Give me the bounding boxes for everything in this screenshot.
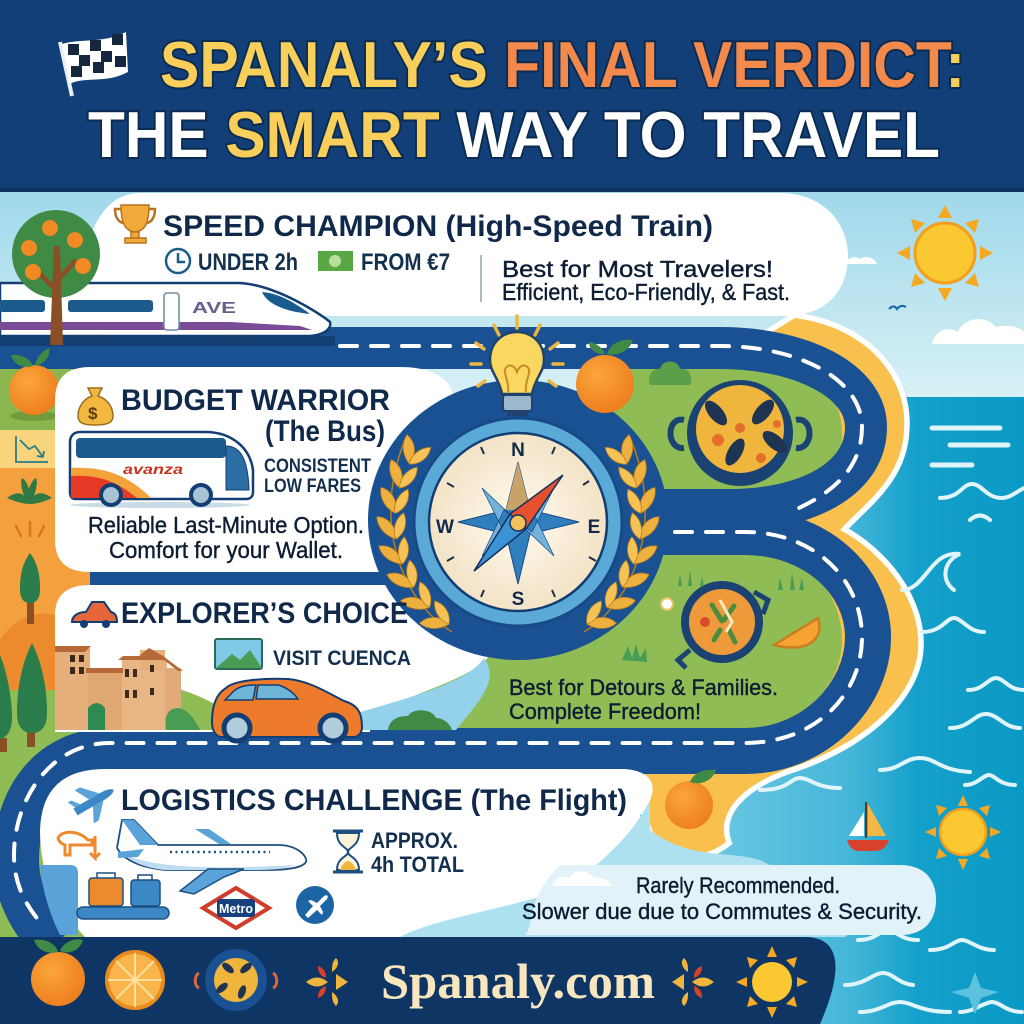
- title line 1: SPANALY’S FINAL VERDICT:: [160, 28, 965, 101]
- icon: money bag: $: [88, 404, 98, 423]
- budget description: Reliable Last-Minute Option.: [88, 512, 364, 538]
- icon: baggage conveyor: [40, 832, 169, 935]
- icon: hourglass: [333, 831, 363, 872]
- compass needle: [474, 475, 563, 571]
- icon: trophy: [115, 205, 155, 243]
- hill: [120, 680, 250, 730]
- price label: FROM €7: [361, 249, 450, 276]
- budget description: Comfort for your Wallet.: [109, 537, 343, 563]
- icon: checkered flag: [60, 32, 128, 96]
- icon: footer sun: [736, 946, 808, 1018]
- icon: paella pan large: [670, 380, 810, 486]
- roads: [0, 336, 868, 945]
- compass body: [414, 418, 622, 626]
- train: [0, 283, 330, 342]
- header band: [0, 0, 1024, 192]
- site name: Spanaly.com: [381, 953, 655, 1009]
- icon: laurel wreath: [377, 435, 659, 637]
- icon: tree small: [20, 553, 40, 624]
- icon: left orange: [9, 348, 59, 421]
- panel: budget warrior card: [55, 367, 453, 572]
- icon: money bag: [78, 388, 113, 425]
- panel: logistics challenge card: [40, 769, 653, 937]
- icon: flourish left: [306, 958, 348, 1006]
- time label: UNDER 2h: [198, 249, 298, 276]
- icon: light bulb: [471, 316, 563, 416]
- panel: compass: [368, 380, 668, 660]
- recommendation text: Slower due due to Commutes & Security.: [522, 899, 922, 924]
- icon: flourish right: [672, 958, 714, 1006]
- icon: plant: [7, 478, 52, 504]
- bush: [388, 710, 452, 730]
- compass letters: E: [588, 517, 600, 538]
- icon: cypress left: [0, 655, 12, 752]
- panel: explorer's choice card: [55, 585, 490, 732]
- compass letters: S: [512, 589, 524, 610]
- icon: grass tufts: [622, 570, 804, 662]
- detours text: Best for Detours & Families.: [509, 675, 778, 700]
- left land strip: [0, 365, 100, 940]
- icon: falling chart: [16, 436, 48, 462]
- panel: rarely recommended note: [522, 865, 936, 935]
- train logo: AVE: [192, 300, 236, 317]
- lower lagoon water: [400, 800, 850, 937]
- icon: orange slice round: [107, 952, 163, 1008]
- best for text: Efficient, Eco-Friendly, & Fast.: [502, 279, 790, 305]
- icon: banknote: [318, 251, 353, 271]
- best for text: Best for Most Travelers!: [502, 256, 773, 282]
- recommendation text: Rarely Recommended.: [636, 873, 840, 898]
- river: [360, 658, 490, 730]
- compass rose: [458, 462, 579, 584]
- icon: bush: [649, 362, 691, 385]
- cloud: lagoon: [552, 871, 612, 886]
- icon: footer orange: [31, 939, 85, 1006]
- icon: sailboat: [847, 802, 889, 851]
- icon: picture: [215, 639, 262, 669]
- compass letters: N: [511, 440, 525, 461]
- car: [212, 679, 362, 741]
- compass ticks: [447, 447, 596, 597]
- icon: metro sign: [203, 888, 269, 928]
- icon: plane small: [64, 773, 123, 829]
- icon: paella pan small: [678, 581, 768, 668]
- approx label: APPROX.: [371, 828, 458, 853]
- cloud: right: [932, 319, 1024, 344]
- compass face: [429, 433, 607, 611]
- icon: orange: [576, 340, 634, 413]
- green patch upper: [600, 360, 842, 512]
- icon: sprout rays: [16, 522, 44, 536]
- compass letters: W: [436, 517, 454, 538]
- icon: sun lower right: [925, 795, 1001, 870]
- icon: flower: [661, 598, 673, 610]
- heading: logistics challenge: LOGISTICS CHALLENGE (The Flight): [121, 784, 627, 817]
- sea background: [640, 397, 1024, 1024]
- sea waves: [760, 428, 1024, 1014]
- bird: [889, 306, 906, 309]
- bus logo: avanza: [123, 461, 183, 477]
- icon: airport circle: [296, 886, 334, 924]
- icon: orange tree: [12, 210, 100, 345]
- icon: airplane: [117, 820, 306, 894]
- heading: explorer's choice: EXPLORER’S CHOICE: [121, 597, 408, 630]
- cloud: small: [845, 257, 877, 264]
- subheading: the bus: (The Bus): [265, 415, 385, 448]
- town illustration: [55, 646, 200, 730]
- footer band: [0, 937, 835, 1024]
- detours text: Complete Freedom!: [509, 699, 701, 724]
- icon: sun top right: [897, 205, 993, 301]
- low fares label: CONSISTENT: [264, 456, 371, 477]
- icon: bus: [70, 432, 253, 508]
- approx label: 4h TOTAL: [371, 852, 464, 877]
- green patch lower: [410, 552, 842, 730]
- icon: clock: [166, 249, 190, 273]
- shore foam: [640, 870, 770, 910]
- icon: orange slice: [774, 618, 819, 647]
- icon: orange on beach: [665, 770, 716, 829]
- heading: budget warrior: BUDGET WARRIOR: [121, 384, 390, 417]
- beach: [500, 318, 918, 854]
- icon: footer paella: [195, 949, 277, 1011]
- title line 2: THE SMART WAY TO TRAVEL: [88, 98, 940, 171]
- sky background: [0, 190, 1024, 400]
- icon: cypress large: [17, 643, 47, 747]
- compass letters: [436, 440, 600, 610]
- visit cuenca label: VISIT CUENCA: [273, 647, 411, 670]
- panel: speed champion card: [0, 193, 848, 316]
- icon: metro sign: Metro: [219, 902, 253, 916]
- low fares label: LOW FARES: [264, 476, 361, 497]
- icon: small car: [72, 602, 117, 628]
- heading: speed champion: SPEED CHAMPION (High-Speed Train): [163, 210, 713, 243]
